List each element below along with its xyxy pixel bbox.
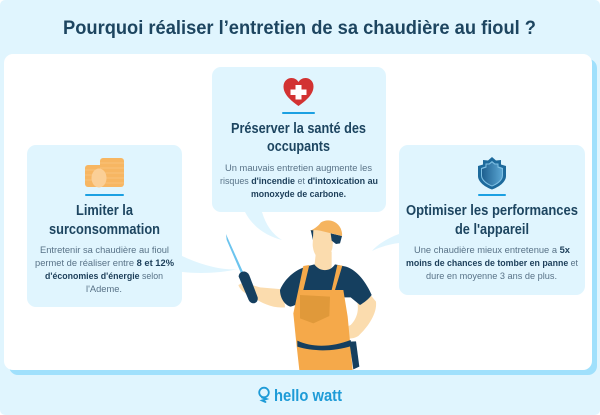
heading: surconsommation [49, 222, 160, 238]
body text: moins de chances de tomber en panne et [406, 258, 578, 268]
logo wordmark: hello watt [274, 387, 342, 405]
body text: Une chaudière mieux entretenue a 5x [414, 245, 571, 255]
heading: Préserver la santé des [231, 121, 366, 137]
screwdriver shaft [226, 234, 243, 274]
body text [220, 163, 378, 199]
accent line [478, 194, 506, 196]
body text [35, 245, 174, 294]
face [313, 230, 333, 258]
t-shirt [280, 264, 372, 307]
heading [406, 203, 578, 238]
raised arm [238, 283, 285, 308]
panel: préserver la santé [212, 67, 386, 240]
apron [293, 265, 353, 370]
body text: Un mauvais entretien augmente les [225, 163, 372, 173]
accent line [85, 194, 124, 196]
panel: optimiser les performances [372, 145, 585, 295]
heading [231, 121, 366, 155]
body text: Entretenir sa chaudière au fioul [40, 245, 169, 255]
belt [297, 340, 352, 350]
right arm and hand [339, 288, 376, 339]
logo: hello watt [259, 387, 342, 405]
body text: permet de réaliser entre 8 et 12% [35, 258, 174, 268]
body text: monoxyde de carbone. [251, 189, 346, 199]
body text: l'Ademe. [86, 284, 122, 294]
icon: light bulb [259, 388, 269, 402]
tool pouch [349, 341, 359, 369]
main white panel [4, 54, 597, 375]
speech bubble card center [212, 67, 386, 240]
icon: heart with cross [284, 78, 314, 106]
heading [49, 203, 160, 238]
body text: dure en moyenne 3 ans de plus. [426, 271, 557, 281]
illustration: technician with screwdriver [226, 220, 376, 370]
accent line [282, 112, 315, 114]
heading: Optimiser les performances [406, 203, 578, 219]
title: Pourquoi réaliser l’entretien de sa chaudière au fioul ? [63, 18, 536, 39]
icon: coins [85, 158, 124, 188]
body text: d'économies d'énergie selon [45, 271, 163, 281]
panel: limiter la surconsommation [27, 145, 238, 307]
heading: de l'appareil [455, 222, 529, 238]
hair tuft over face [331, 233, 342, 244]
screwdriver handle [239, 271, 258, 303]
neck [314, 252, 332, 272]
body text [406, 245, 578, 281]
heading: Limiter la [76, 203, 134, 219]
cap [311, 220, 342, 236]
hair [311, 230, 317, 243]
icon: shield [478, 157, 506, 190]
body text: risques d'incendie et d'intoxication au [220, 176, 378, 186]
apron pocket [300, 295, 330, 323]
speech bubble card left [27, 145, 238, 307]
heading: occupants [267, 139, 330, 155]
speech bubble card right [372, 145, 585, 295]
